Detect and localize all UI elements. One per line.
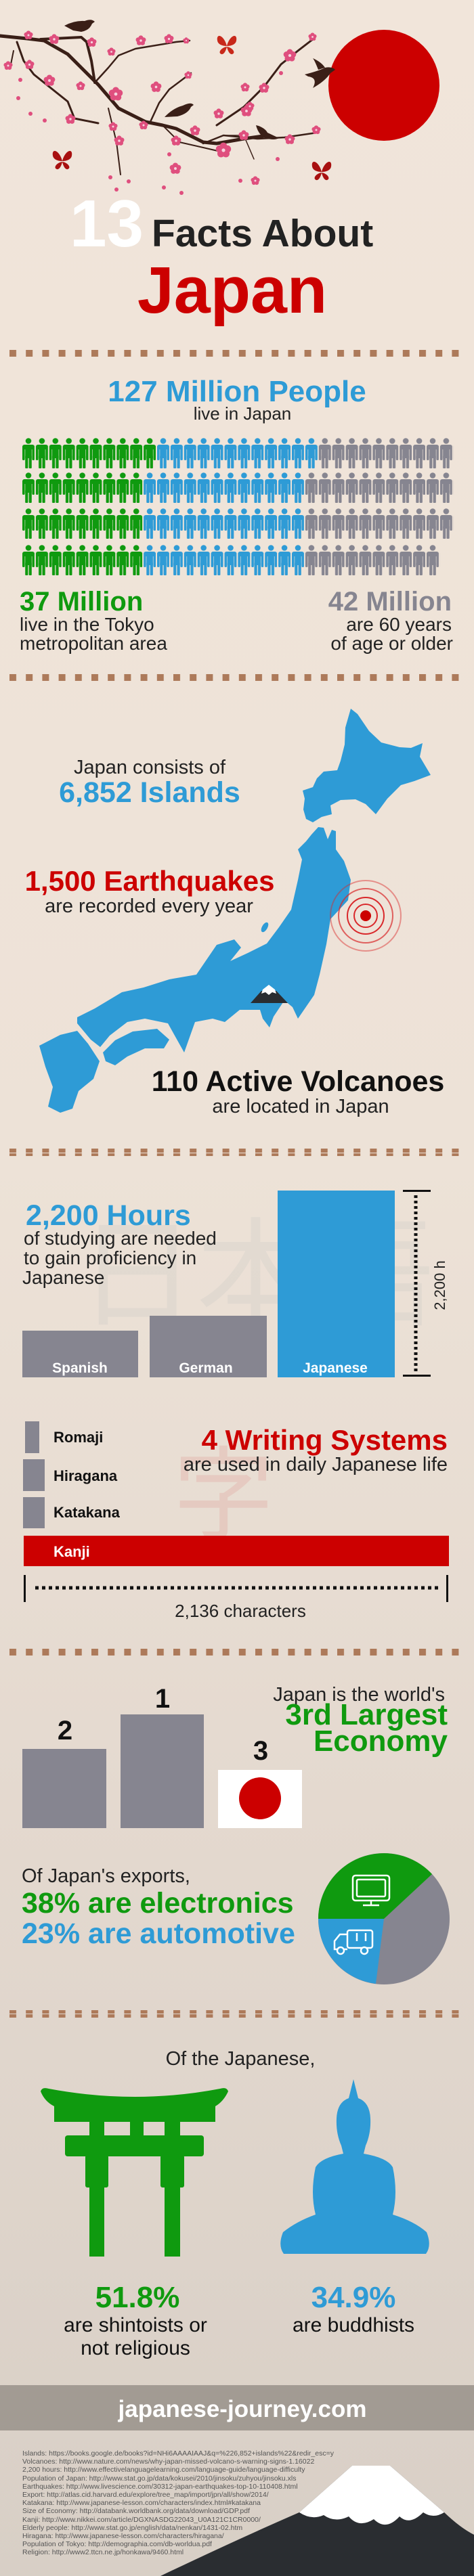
text: 3rd largest economy: 3rd Largest <box>285 1698 448 1731</box>
sources: Elderly people: http://www.stat.go.jp/english/data/nenkan/1431-02.htm <box>22 2524 242 2532</box>
watermark kanji: 字 <box>173 1414 274 1561</box>
title: Facts About <box>152 212 373 255</box>
chart: economy podium <box>22 1684 302 1828</box>
panel: language <box>22 1180 448 1377</box>
birds <box>64 20 335 139</box>
panel: geography <box>25 709 444 1117</box>
bar chart: writing systems <box>23 1421 449 1566</box>
stat: buddhists <box>293 2281 414 2336</box>
chart: economy podium: 2 <box>58 1716 72 1746</box>
butterflies <box>217 36 236 54</box>
sources: Islands: https://books.google.de/books?id=NHi6AAAAIAAJ&q=%226,852+islands%22&redir_esc=y <box>22 2449 335 2458</box>
pie chart: exports <box>318 1853 450 1984</box>
panel: population <box>20 375 454 654</box>
text: islands <box>59 757 240 809</box>
text: exports: 38% are electronics <box>22 1887 294 1919</box>
sources: Population of Tokyo: http://demographia.com/db-worldua.pdf <box>22 2540 212 2548</box>
text: 4 writing systems: 4 Writing Systems <box>202 1424 448 1456</box>
text: 37 million tokyo <box>20 587 167 654</box>
map of Japan <box>39 709 431 1113</box>
stat: shinto <box>64 2281 207 2359</box>
text: 4 writing systems <box>184 1424 448 1475</box>
sources: Kanji: http://www.nikkei.com/article/DGXNASDG22043_U0A121C1CR0000/ <box>22 2516 261 2524</box>
stat: buddhists: 34.9% <box>311 2281 395 2314</box>
bar chart: study hours: Spanish <box>52 1360 108 1376</box>
sources: Population of Japan: http://www.stat.go.jp/data/kokusei/2010/jinsoku/zuhyou/jinsoku.xls <box>22 2474 297 2483</box>
text: 2,200 hours <box>22 1199 217 1288</box>
bar chart: writing systems: Katakana <box>53 1504 121 1521</box>
text: 2,200 hours: of studying are needed <box>24 1228 217 1249</box>
sources: Earthquakes: http://www.livescience.com/30312-japan-earthquakes-top-10-110408.html <box>22 2483 298 2491</box>
text: volcanoes: are located in Japan <box>212 1096 389 1117</box>
bar chart: study hours: German <box>179 1360 233 1376</box>
panel: religion: Of the Japanese, <box>166 2048 315 2070</box>
text: 42 million elderly: are 60 years <box>346 614 452 635</box>
icon: monitor <box>353 1875 389 1905</box>
dimension: 2,200 h: 2,200 h <box>431 1260 448 1310</box>
text: exports <box>22 1865 295 1950</box>
stat: shinto: are shintoists or <box>64 2314 207 2336</box>
dimension: 2,136 characters: 2,136 characters <box>175 1601 306 1621</box>
bar chart: study hours: Japanese <box>303 1360 368 1376</box>
text: exports: 23% are automotive <box>22 1917 295 1950</box>
chart: people pictogram <box>22 438 454 575</box>
text: islands: Japan consists of <box>74 757 226 778</box>
illustration: Mt Fuji <box>160 2466 474 2576</box>
title: Japan <box>137 253 327 327</box>
text: volcanoes: 110 Active Volcanoes <box>152 1065 444 1098</box>
panel: population: live in Japan <box>194 403 291 424</box>
text: 2,200 hours: 2,200 Hours <box>26 1199 191 1232</box>
text: earthquakes <box>25 865 274 917</box>
bar chart: writing systems: Hiragana <box>53 1467 118 1484</box>
icon: Mt Fuji on map <box>251 985 288 1003</box>
blossoms <box>3 30 321 195</box>
icon: truck <box>335 1930 372 1954</box>
text: 3rd largest economy: Economy <box>314 1725 448 1758</box>
text: 42 million elderly <box>328 587 453 654</box>
text: 2,200 hours: to gain proficiency in <box>24 1247 196 1268</box>
sources: Katakana: http://www.japanese-lesson.com/characters/index.html#katakana <box>22 2499 261 2507</box>
footer banner <box>0 2385 474 2430</box>
text: islands: 6,852 Islands <box>59 776 240 809</box>
stat: shinto: 51.8% <box>95 2281 179 2314</box>
text: 42 million elderly: 42 Million <box>328 587 452 617</box>
sources: Export: http://atlas.cid.harvard.edu/explore/tree_map/import/jpn/all/show/2014/ <box>22 2491 269 2499</box>
icon: red sun <box>328 30 439 141</box>
icon: buddha <box>280 2079 429 2254</box>
icon: torii gate <box>41 2088 228 2257</box>
bar chart: study hours <box>22 1191 395 1377</box>
stat: shinto: not religious <box>81 2337 190 2359</box>
sources: Hiragana: http://www.japanese-lesson.com/characters/hiragana/ <box>22 2532 224 2540</box>
text: 2,200 hours: Japanese <box>22 1267 104 1288</box>
bar chart: writing systems: Kanji <box>53 1543 90 1560</box>
cherry branch <box>0 36 317 175</box>
sources: Size of Economy: http://databank.worldbank.org/data/download/GDP.pdf <box>22 2507 250 2515</box>
text: exports: Of Japan's exports, <box>22 1865 190 1887</box>
sources: Volcanoes: http://www.nature.com/news/why-japan-missed-volcano-s-warning-signs-1.16022 <box>22 2458 314 2466</box>
icon: earthquake rings <box>330 881 401 951</box>
panel: economy <box>22 1684 450 1984</box>
text: volcanoes <box>152 1065 444 1117</box>
illustration: cherry branch with sun, birds and butterflies <box>0 20 439 195</box>
text: 37 million tokyo: live in the Tokyo <box>20 614 154 635</box>
chart: economy podium: 1 <box>155 1684 170 1714</box>
stat: buddhists: are buddhists <box>293 2314 414 2336</box>
sources <box>22 2449 335 2556</box>
title <box>70 186 373 327</box>
text: 37 million tokyo: metropolitan area <box>20 633 167 654</box>
text: 3rd largest economy <box>273 1684 448 1758</box>
text: 4 writing systems: are used in daily Japanese life <box>184 1454 448 1475</box>
sources: 2,200 hours: http://www.effectivelanguagelearning.com/language-guide/language-difficulty <box>22 2466 305 2474</box>
panel: religion <box>41 2048 429 2359</box>
footer banner: japanese-journey.com <box>118 2396 366 2422</box>
text: earthquakes: are recorded every year <box>45 895 253 917</box>
heading: 127 million people: 127 Million People <box>108 375 366 408</box>
panel: writing systems <box>23 1414 449 1621</box>
text: 37 million tokyo: 37 Million <box>20 587 143 617</box>
text: 42 million elderly: of age or older <box>330 633 453 654</box>
watermark kanji: 日本語 <box>78 1180 433 1351</box>
bar chart: writing systems: Romaji <box>53 1429 103 1446</box>
text: earthquakes: 1,500 Earthquakes <box>25 865 274 897</box>
title: 13 <box>70 186 144 261</box>
text: 3rd largest economy: Japan is the world's <box>273 1684 445 1706</box>
sources: Religion: http://www2.ttcn.ne.jp/honkawa/9460.html <box>22 2548 184 2556</box>
chart: economy podium: 3 <box>253 1736 268 1766</box>
dimension: 2,136 characters <box>24 1575 448 1621</box>
dimension: 2,200 h <box>403 1190 448 1377</box>
